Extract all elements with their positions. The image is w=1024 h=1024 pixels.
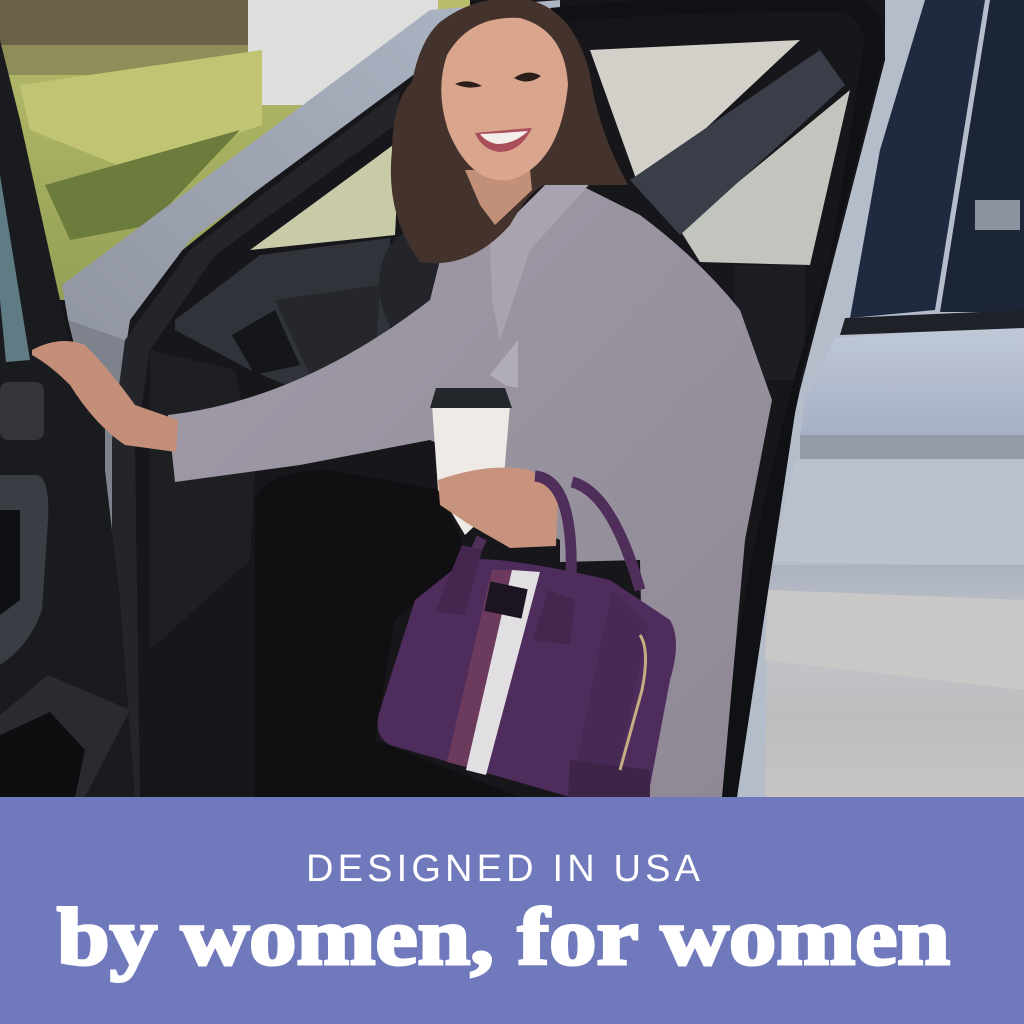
open door frame	[62, 0, 560, 797]
door panel left	[0, 40, 135, 797]
photo base	[0, 0, 1024, 797]
headline: by women, for women	[57, 891, 950, 982]
hair	[391, 0, 628, 263]
car interior	[120, 0, 870, 797]
black pants	[255, 470, 520, 797]
photo: woman stepping out of car	[0, 0, 1024, 797]
grey cardigan	[168, 175, 772, 797]
subheading: DESIGNED IN USA	[306, 848, 701, 890]
hand on door	[32, 341, 178, 452]
door seal	[550, 0, 883, 797]
coffee cup	[430, 388, 512, 535]
outdoor background	[0, 0, 470, 300]
car body right	[737, 0, 1024, 797]
banner	[0, 797, 1024, 1024]
face and neck	[441, 18, 568, 225]
lunch bag	[378, 545, 676, 797]
bag handles	[452, 476, 640, 600]
hand on cup	[438, 468, 558, 548]
